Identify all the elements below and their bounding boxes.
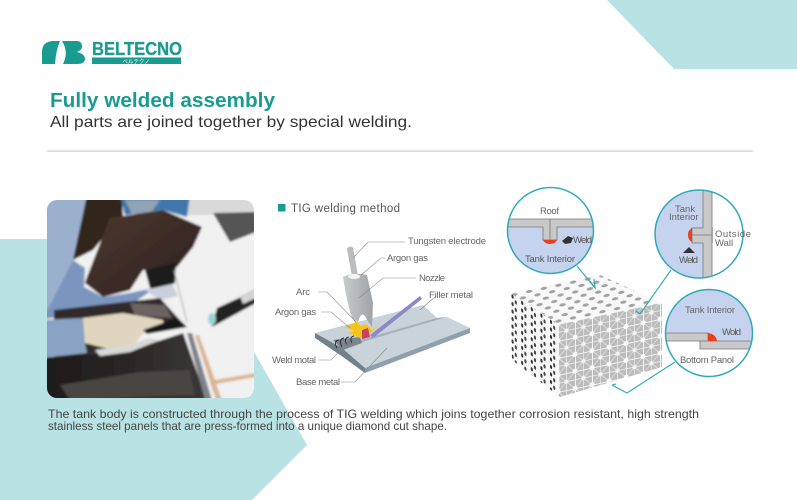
icon: weld bead — [333, 337, 362, 350]
callout: roof weld: Weld — [573, 235, 592, 246]
diagram labels: Weld motal — [272, 355, 316, 366]
description text: stainless steel panels that are press-formed into a unique diamond cut shape. — [48, 419, 447, 433]
callout: roof weld — [505, 186, 597, 276]
callout: wall weld: Outside — [715, 229, 751, 240]
legend: TIG welding method: TIG welding method — [291, 203, 400, 215]
diagram labels — [272, 236, 486, 388]
callout: wall weld — [654, 189, 751, 279]
icon: weld pool — [362, 328, 370, 339]
icon: weld mark — [562, 236, 573, 244]
callout: wall weld: Weld — [679, 255, 698, 266]
tank isometric illustration — [510, 275, 662, 397]
callout: bottom panel weld: Wold — [722, 327, 741, 338]
diagram labels: Arc — [296, 287, 310, 298]
callout: bottom panel weld: Bottom Panol — [680, 355, 734, 366]
connector lines — [577, 266, 675, 393]
callout: wall weld: Tank — [675, 204, 695, 215]
callout: bottom panel weld — [664, 288, 754, 378]
subheading: All parts are joined together by special welding. — [50, 114, 412, 131]
logo: Beltecno — [42, 39, 182, 66]
callout: bottom panel weld: Tank Interior — [685, 305, 735, 316]
heading: Fully welded assembly — [50, 90, 276, 112]
logo: Beltecno: ベルテクノ — [122, 58, 150, 66]
callout: wall weld: Wall — [715, 238, 733, 249]
icon: weld mark — [683, 247, 695, 253]
logo: Beltecno: BELTECNO — [92, 39, 182, 59]
icon: tungsten electrode — [347, 246, 358, 276]
icon: nozzle — [343, 274, 373, 327]
TIG welding diagram — [272, 236, 486, 388]
photo: welder at work — [47, 200, 254, 398]
diagram labels: Argon gas — [387, 253, 428, 264]
diagram leader lines — [318, 242, 436, 382]
diagram labels: Nozzle — [419, 273, 445, 284]
callout: roof weld: Tank Interior — [525, 254, 575, 265]
diagram labels: Base metal — [296, 377, 340, 388]
top-right background shape — [607, 0, 797, 69]
diagram labels: Argon gas — [275, 307, 316, 318]
callout: roof weld: Roof — [540, 206, 559, 217]
diagram labels: Tungsten electrode — [408, 236, 486, 247]
diagram labels: Filler metal — [429, 290, 473, 301]
description text — [48, 407, 699, 433]
bottom-left background shape — [0, 239, 307, 500]
icon: arc sparks — [345, 318, 380, 338]
description text: The tank body is constructed through the process of TIG welding which joins together corrosion resistant, high strength — [48, 407, 699, 421]
callout: wall weld: Interior — [669, 212, 699, 223]
base metal plates — [315, 305, 470, 373]
icon: filler rod — [370, 296, 422, 338]
